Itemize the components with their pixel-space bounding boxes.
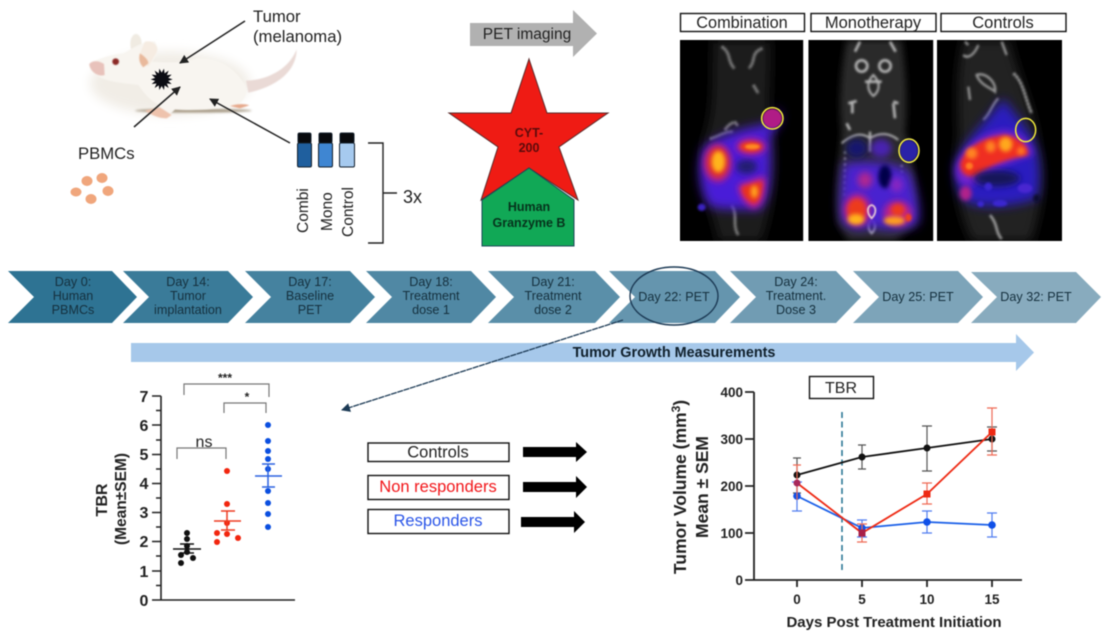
x axis numbers: 15: [984, 592, 1000, 607]
axis numbers: 1: [140, 564, 149, 581]
step: Day 17: [245, 271, 375, 323]
axis numbers: 3: [140, 505, 149, 522]
step: Day 14: implantation: [154, 303, 222, 317]
step: Day 21: Treatment: [525, 289, 582, 303]
icon: white mouse: [89, 34, 297, 118]
step: Day 0: Human: [53, 289, 93, 303]
house: Human Granzyme B: [482, 168, 574, 246]
arrow: PET imaging: [470, 10, 597, 57]
step: Day 0: Day 0:: [55, 275, 91, 289]
step: Day 32: [971, 272, 1101, 323]
series: responders: [255, 422, 282, 530]
label: vial names: Control: [340, 187, 357, 237]
axis title: TBR: [94, 483, 111, 516]
step: Day 18: Day 18:: [409, 275, 453, 289]
PET scan: controls: [937, 40, 1062, 241]
y axis numbers: 400: [720, 385, 743, 400]
y axis numbers: 300: [720, 432, 743, 447]
tumor ROI: [899, 139, 919, 162]
legend: controls: Controls: [407, 444, 469, 462]
step: Day 18: [366, 271, 496, 323]
step: Day 24: Dose 3: [776, 303, 816, 317]
panel: PET images: [680, 14, 1066, 241]
icon: PBMC cells: [70, 173, 114, 204]
series: controls: [173, 530, 201, 566]
arrow: Tumor Growth Measurements: Tumor Growth Measurements: [573, 345, 775, 361]
legend: non responders: [368, 476, 587, 500]
step: Day 14: Tumor: [170, 289, 206, 303]
chart: TBR scatter: [94, 371, 295, 610]
arrow: Tumor Growth Measurements: [131, 334, 1034, 371]
step: Day 17: Day 17:: [288, 275, 332, 289]
label: Controls: [941, 14, 1066, 32]
step: Day 25: Day 25: PET: [882, 290, 954, 304]
label: 3x: 3x: [403, 187, 422, 207]
step: Day 24: Day 24:: [774, 275, 818, 289]
label: Controls: Controls: [972, 14, 1034, 32]
label: vial names: [295, 187, 357, 237]
marker: TBR timepoint: [841, 412, 843, 570]
step: Day 21: [488, 271, 620, 323]
y axis numbers: 200: [720, 479, 743, 494]
legend: responders: [368, 510, 585, 534]
step: Day 18: dose 1: [412, 303, 450, 317]
diagram: CYT-200 tracer and Granzyme B: [449, 59, 608, 246]
label: Monotherapy: Monotherapy: [825, 14, 922, 32]
panel: mouse model: [70, 7, 422, 243]
y axis title: [669, 400, 712, 574]
x axis numbers: [793, 592, 1000, 607]
label: vial names: Combi: [295, 188, 312, 233]
label: tumor: (melanoma): [253, 27, 342, 46]
step: Day 22: [609, 271, 740, 323]
step: Day 22: Day 22: PET: [638, 290, 710, 304]
series: non responders: [793, 408, 997, 542]
y axis title: 3: [669, 405, 683, 412]
timeline: [8, 271, 1101, 323]
arrow: to tumor: [180, 21, 245, 63]
brackets: [177, 384, 269, 459]
axis numbers: 7: [140, 389, 149, 406]
significance labels: [196, 371, 250, 451]
step: Day 24: Treatment.: [766, 289, 826, 303]
y axis numbers: 0: [735, 573, 743, 588]
axis numbers: 4: [140, 476, 149, 493]
arrow: treatment injection: [210, 99, 290, 143]
series: non responders: [214, 468, 241, 545]
significance labels: ***: [218, 371, 232, 385]
axis numbers: 5: [140, 447, 149, 464]
y axis title: ): [670, 400, 690, 406]
label: vial names: Mono: [319, 192, 336, 231]
y axis numbers: [720, 385, 743, 588]
series: responders: [792, 482, 997, 537]
arrow: PET imaging: PET imaging: [483, 26, 571, 43]
significance labels: ns: [196, 434, 212, 451]
label: PBMCs: PBMCs: [78, 144, 135, 163]
PET scan: monotherapy: [808, 40, 933, 241]
legend: responders: Responders: [394, 512, 482, 530]
legend: controls: [368, 442, 587, 462]
legend: non responders: Non responders: [379, 478, 497, 496]
series: controls: [793, 426, 997, 493]
chart: tumor volume over time: [669, 376, 1022, 631]
step: Day 18: Treatment: [403, 289, 460, 303]
step: Day 14: Day 14:: [166, 275, 210, 289]
PET scan: combination: [680, 40, 803, 241]
star: CYT-200: 200: [519, 141, 539, 155]
label: tumor: Tumor: [253, 7, 301, 26]
label: TBR box: [810, 376, 874, 398]
axes: [152, 396, 295, 600]
step: Day 17: Baseline: [286, 289, 334, 303]
step: Day 0: PBMCs: [52, 303, 94, 317]
house: Human Granzyme B: Human: [508, 200, 550, 214]
x axis title: Days Post Treatment Initiation: [786, 614, 1002, 631]
step: Day 14: [123, 271, 253, 323]
callout: Day 22 highlight: [630, 267, 718, 325]
axis title: [94, 453, 130, 545]
step: Day 21: dose 2: [534, 303, 572, 317]
house: Human Granzyme B: Granzyme B: [493, 216, 565, 230]
y axis title: Tumor Volume (mm: [670, 412, 690, 574]
arrow: PBMC injection: [134, 87, 180, 127]
y axis numbers: 100: [720, 526, 743, 541]
axis numbers: 2: [140, 534, 149, 551]
tumor ROI: [762, 108, 783, 129]
axis numbers: [140, 389, 149, 610]
axes: [745, 392, 1022, 587]
axis title: (Mean±SEM): [113, 453, 130, 545]
y axis title: Mean ± SEM: [692, 436, 712, 538]
step: Day 17: PET: [298, 303, 323, 317]
legend: [368, 442, 587, 534]
axis numbers: 0: [140, 593, 149, 610]
icon: tumor burst: [151, 69, 173, 90]
significance labels: *: [245, 390, 250, 404]
tumor ROI: [1016, 118, 1036, 142]
step: Day 25: [853, 271, 983, 323]
icon: three vials: [298, 133, 354, 167]
label: TBR box: TBR: [825, 380, 857, 397]
x axis numbers: 10: [919, 592, 935, 607]
axis numbers: 6: [140, 418, 149, 435]
arrow: Day 22 to TBR chart: [342, 320, 623, 410]
step: Day 24: [730, 271, 861, 323]
x axis numbers: 5: [858, 592, 866, 607]
step: Day 21: Day 21:: [531, 275, 575, 289]
label: Combination: Combination: [696, 14, 788, 32]
star: CYT-200: CYT-: [515, 126, 543, 140]
step: Day 32: Day 32: PET: [1000, 290, 1072, 304]
bracket: 3x: [368, 143, 397, 243]
step: Day 0: [8, 271, 137, 323]
x axis numbers: 0: [793, 592, 801, 607]
star: CYT-200: [449, 59, 608, 200]
